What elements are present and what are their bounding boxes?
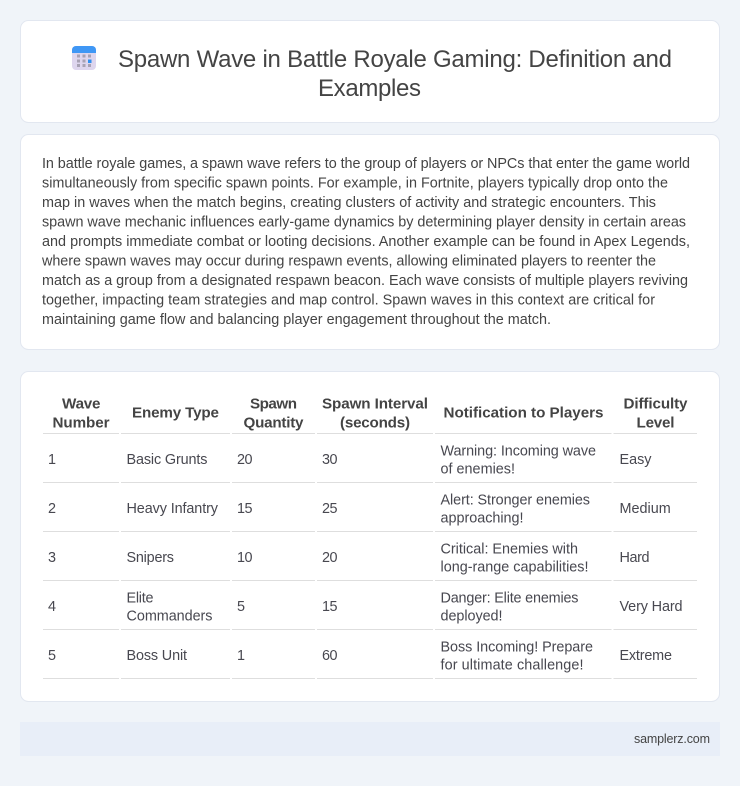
text block: description bbox=[41, 156, 690, 328]
table header: (seconds) bbox=[340, 414, 410, 432]
table row: wave 1: Basic Grunts bbox=[126, 452, 208, 468]
footer bbox=[20, 722, 720, 756]
table row: wave 3: Snipers bbox=[126, 550, 174, 566]
table row: wave 5 bbox=[48, 640, 672, 674]
title: Examples bbox=[318, 75, 421, 102]
table row: wave 2: Heavy Infantry bbox=[126, 501, 219, 517]
table header: Level bbox=[636, 414, 674, 432]
panel: data table bbox=[20, 372, 720, 702]
table header: Enemy Type bbox=[132, 404, 219, 422]
text block: description: together, impacting team strategies and map control. Spawn waves in this context are critical for bbox=[42, 292, 655, 308]
table header: Wave bbox=[62, 396, 100, 412]
footer credit: samplerz.com bbox=[634, 732, 710, 746]
table header: Difficulty bbox=[624, 396, 688, 412]
text block: description: In battle royale games, a spawn wave refers to the group of players or NPCs that enter the game world bbox=[42, 156, 690, 172]
table row: wave 3: long-range capabilities! bbox=[440, 560, 588, 576]
table row: wave 3: 3 bbox=[48, 550, 56, 566]
table row: wave 1: of enemies! bbox=[440, 462, 515, 478]
table row: wave 5: Extreme bbox=[620, 648, 672, 664]
table row: wave 4: Danger: Elite enemies bbox=[440, 590, 578, 606]
table row: wave 1: 20 bbox=[237, 452, 252, 468]
table row: wave 4: 4 bbox=[48, 599, 56, 615]
table header: Spawn bbox=[250, 396, 297, 412]
table row: wave 5: Boss Unit bbox=[126, 648, 187, 664]
text block: description: map in waves when the match begins, creating clusters of activity and strategic encounters. This bbox=[42, 195, 656, 211]
table row: wave 1: Warning: Incoming wave bbox=[440, 444, 596, 460]
table row: wave 5: 5 bbox=[48, 648, 56, 664]
table row: wave 5: 1 bbox=[237, 648, 245, 664]
table row: wave 4: 5 bbox=[237, 599, 245, 615]
table row: wave 2: approaching! bbox=[440, 510, 524, 526]
panel: header bbox=[20, 20, 720, 122]
table row: wave 4: deployed! bbox=[440, 608, 502, 624]
table row: wave 1: 1 bbox=[48, 452, 56, 468]
table header bbox=[52, 396, 688, 432]
table row: wave 2: 15 bbox=[237, 501, 252, 517]
text block: description: maintaining game flow and balancing player engagement throughout the match. bbox=[42, 312, 551, 328]
table row: wave 3: 10 bbox=[237, 550, 252, 566]
table row: wave 3 bbox=[48, 542, 650, 576]
title bbox=[118, 46, 672, 102]
text block: description: where spawn waves may occur during respawn events, allowing eliminated players to reenter the bbox=[41, 254, 656, 270]
table row: wave 1 bbox=[48, 444, 652, 478]
table row: wave 3: Hard bbox=[620, 550, 650, 566]
table row: wave 5: 60 bbox=[322, 648, 338, 664]
table row: wave 2: 2 bbox=[48, 501, 56, 517]
table row: wave 2: Medium bbox=[620, 501, 671, 517]
table row: wave 3: Critical: Enemies with bbox=[440, 542, 578, 558]
table row: wave 4 bbox=[48, 590, 682, 624]
table row: wave 4: Commanders bbox=[126, 608, 212, 624]
panel: description bbox=[20, 134, 720, 350]
table row: wave 2: Alert: Stronger enemies bbox=[440, 492, 590, 508]
table row: wave 1: 30 bbox=[322, 452, 338, 468]
table row: wave 3: 20 bbox=[322, 550, 338, 566]
table row: wave 1: Easy bbox=[620, 452, 652, 468]
text block: description: spawn wave mechanic influences early-game dynamics by determining player density in certain areas bbox=[42, 214, 686, 230]
text block: description: and prompts immediate combat or looting decisions. Another example can be found in Apex Legends, bbox=[42, 234, 690, 250]
table row: wave 4: Very Hard bbox=[620, 599, 682, 615]
icon: calendar bbox=[72, 46, 96, 70]
table row: wave 5: Boss Incoming! Prepare bbox=[440, 640, 593, 656]
table row: wave 4: Elite bbox=[126, 590, 154, 606]
table header: Notification to Players bbox=[444, 404, 604, 422]
table row: wave 5: for ultimate challenge! bbox=[440, 658, 584, 674]
table row: wave 2: 25 bbox=[322, 501, 338, 517]
text block: description: simultaneously from specific spawn points. For example, in Fortnite, players typically drop onto the bbox=[42, 176, 668, 192]
text block: description: match as a group from a designated respawn beacon. Each wave consists of multiple players reviving bbox=[42, 273, 688, 289]
table header: Spawn Interval bbox=[322, 396, 428, 412]
table header: Number bbox=[52, 414, 110, 432]
table rules bbox=[43, 433, 697, 679]
table row: wave 2 bbox=[48, 492, 671, 526]
title: Spawn Wave in Battle Royale Gaming: Definition and bbox=[118, 46, 672, 73]
table header: Quantity bbox=[244, 414, 304, 432]
table row: wave 4: 15 bbox=[322, 599, 338, 615]
